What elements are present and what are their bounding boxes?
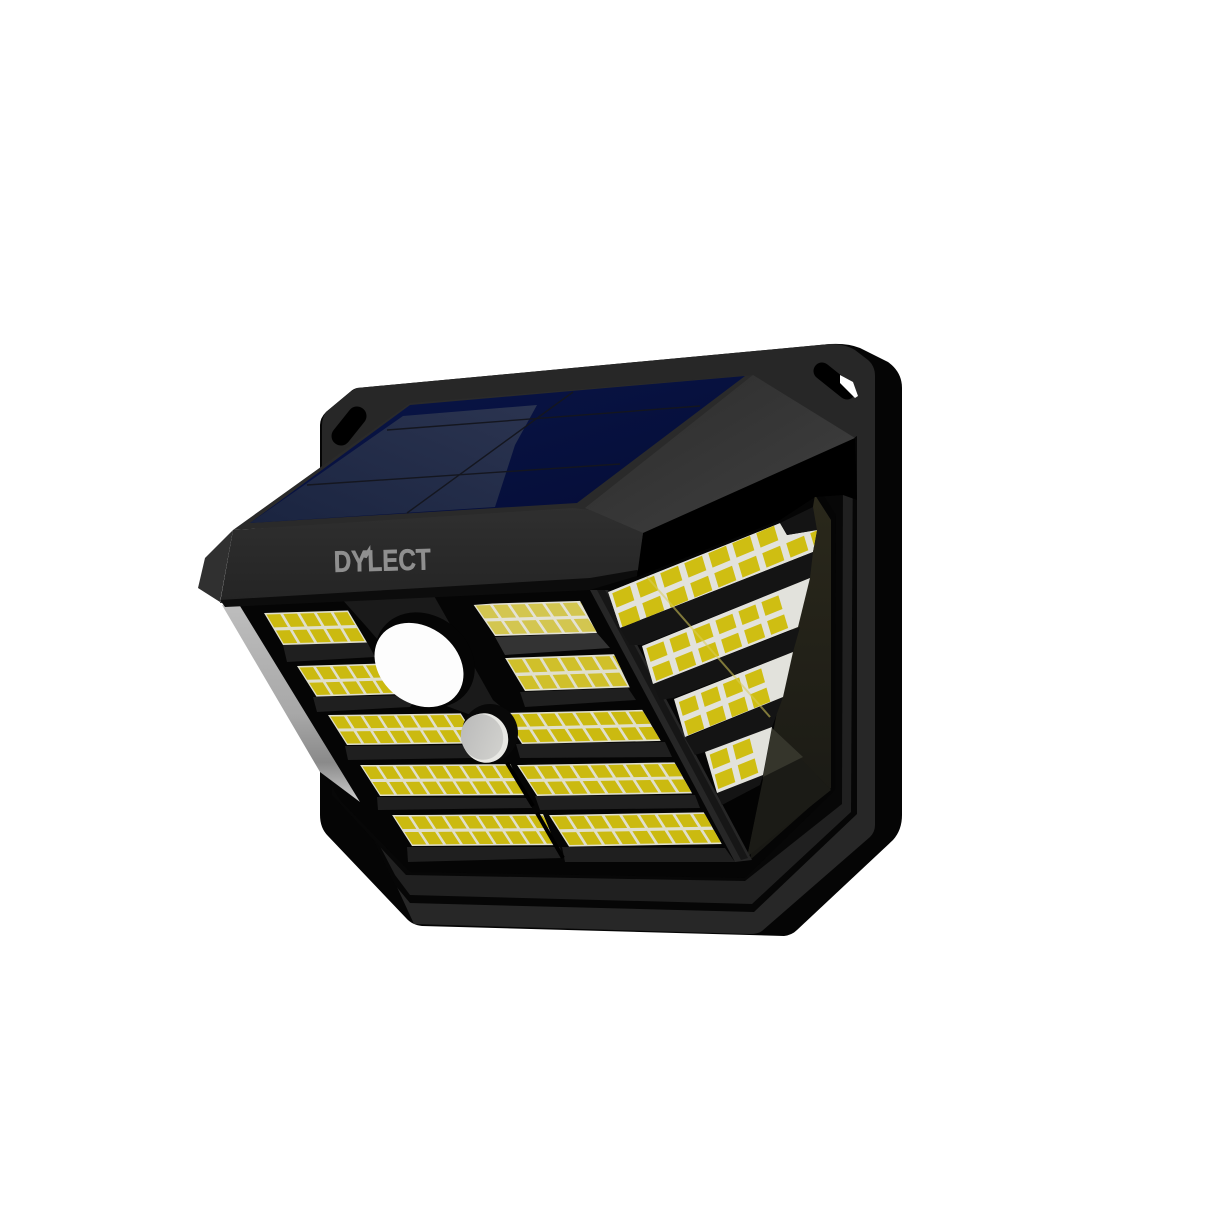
solar cell dark area <box>250 376 745 523</box>
solar panel <box>250 376 745 523</box>
hood right face <box>585 375 855 533</box>
column dividers <box>507 763 563 858</box>
LED tray shadows <box>283 633 735 862</box>
plate step ring outer <box>335 436 857 912</box>
right LED strip 2 <box>642 578 810 684</box>
solar grid lines <box>307 392 700 513</box>
hood front face <box>220 508 643 603</box>
plate step ring middle <box>335 440 853 904</box>
LED row 2 middle <box>505 654 630 691</box>
diagonal crease across right strips <box>647 577 770 717</box>
LED row 4 middle <box>517 762 692 796</box>
logo leaf on Y <box>362 545 371 558</box>
LED row 5 middle <box>549 812 722 847</box>
back plate rim <box>320 344 902 936</box>
brand logo: DYLECT <box>333 543 431 579</box>
hood left bevel <box>198 530 233 602</box>
PIR sensor lens <box>356 593 494 727</box>
right LED strip 1 <box>608 523 817 628</box>
LED row 3 left <box>328 713 480 745</box>
small light sensor <box>454 704 518 769</box>
LED row 3 middle <box>510 710 661 744</box>
mounting hole left <box>341 416 357 436</box>
hood underside shadow <box>637 438 857 577</box>
dark bands between right panels <box>620 507 817 805</box>
mounting hole right <box>822 371 858 398</box>
LED panels left column <box>264 610 580 846</box>
LED row 1 left <box>264 610 367 645</box>
front plate <box>322 344 875 934</box>
LED panels right angled group <box>608 507 833 805</box>
recessed interior <box>225 490 836 878</box>
right LED strip 3 <box>674 652 793 737</box>
diagonal divider strip <box>590 590 752 862</box>
LED row 5 left <box>392 814 554 846</box>
right LED strip 4 <box>705 727 772 793</box>
right interior wall <box>750 495 831 860</box>
LED row 4 left <box>360 764 524 796</box>
LED row 1 middle <box>474 600 597 636</box>
bottom right pyramid facets <box>718 727 831 857</box>
hood front lower edge <box>220 570 637 607</box>
solar reflection <box>250 405 537 523</box>
plate step ring inner <box>332 470 843 881</box>
hood frame surface <box>233 375 753 533</box>
LED panels middle column <box>474 600 722 847</box>
LED row 2 left <box>297 663 416 697</box>
PIR sensor housing <box>340 594 512 722</box>
left glass strip <box>222 605 360 802</box>
product illustration: solar wall light <box>198 344 902 936</box>
